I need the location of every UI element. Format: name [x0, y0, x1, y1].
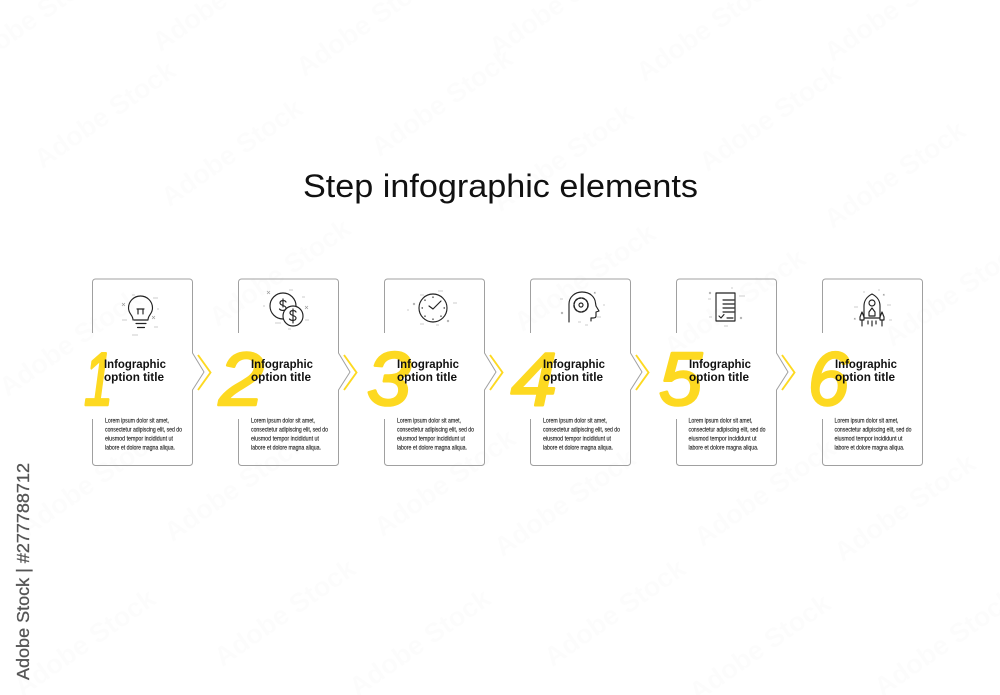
text: Adobe Stock [156, 92, 309, 212]
panel: step 6 [808, 279, 922, 466]
text: Adobe Stock [539, 552, 692, 672]
step 2 body text: Lorem ipsum dolor sit amet, [251, 418, 315, 424]
panel: step 1 [84, 279, 204, 466]
panel: step 2 [218, 279, 350, 466]
number 6: 6 [808, 337, 849, 421]
step 1 body text: eiusmod tempor incididunt ut [105, 436, 173, 442]
step 1 body text: Lorem ipsum dolor sit amet, [105, 418, 169, 424]
panel: step 4 [511, 279, 642, 466]
text: Adobe Stock [14, 422, 167, 542]
text: Adobe Stock [366, 42, 519, 162]
number 3: 3 [367, 337, 411, 421]
stock credit: Adobe Stock | #277788712 [13, 463, 33, 680]
text: Adobe Stock [489, 442, 642, 562]
icon: coins [263, 290, 309, 329]
icon: document [708, 288, 745, 326]
step 2 heading: option title [251, 372, 311, 384]
icon: rocket [854, 290, 892, 326]
step 2 heading: Infographic [251, 359, 314, 371]
arrow: chevron 5 [782, 355, 794, 390]
step 3 body text: Lorem ipsum dolor sit amet, [397, 418, 461, 424]
step 5 body text: Lorem ipsum dolor sit amet, [688, 418, 753, 424]
text: Adobe Stock [509, 217, 662, 337]
step 1 body text: labore et dolore magna aliqua. [105, 444, 175, 452]
step 2 body text: eiusmod tempor incididunt ut [251, 436, 319, 442]
card outline 2 [238, 279, 350, 466]
step 6 body text: Lorem ipsum dolor sit amet, [834, 418, 899, 424]
step 1 heading: option title [104, 372, 164, 384]
text: Adobe Stock [369, 422, 522, 542]
step 5 heading: Infographic [689, 359, 752, 371]
step 3 heading: option title [397, 372, 457, 384]
number 4: 4 [511, 337, 557, 421]
card outline 3 [384, 279, 496, 466]
icon: clock [407, 291, 457, 325]
panel: step 5 [659, 279, 788, 466]
step 6 body text: consectetur adipiscing elit, sed do [834, 426, 912, 434]
arrow: chevron 2 [344, 355, 356, 390]
arrow: chevron 4 [636, 355, 648, 390]
step 6 heading: option title [835, 372, 895, 384]
title: Step infographic elements [303, 168, 698, 204]
icon: light bulb [122, 295, 159, 335]
text: Adobe Stock [159, 427, 312, 547]
step 4 body text: labore et dolore magna aliqua. [543, 444, 613, 452]
step 3 body text: consectetur adipiscing elit, sed do [397, 426, 474, 434]
card outline 4 [530, 279, 642, 466]
step 4 body text: consectetur adipiscing elit, sed do [543, 426, 620, 434]
step 4 heading: Infographic [543, 359, 606, 371]
step 3 heading: Infographic [397, 359, 460, 371]
card outline 6 [822, 279, 922, 466]
text: Adobe Stock [819, 114, 972, 234]
step 1 heading: Infographic [104, 359, 167, 371]
text: Adobe Stock [829, 447, 982, 567]
step 5 body text: eiusmod tempor incididunt ut [688, 436, 757, 442]
step 1 body text: consectetur adipiscing elit, sed do [105, 426, 182, 434]
step 5 body text: consectetur adipiscing elit, sed do [688, 426, 766, 434]
text: Adobe Stock [487, 97, 640, 217]
step 2 body text: labore et dolore magna aliqua. [251, 444, 321, 452]
card outline 1 [92, 279, 204, 466]
card outline 5 [676, 279, 788, 466]
step 5 body text: labore et dolore magna aliqua. [688, 444, 759, 452]
step 5 heading: option title [689, 372, 749, 384]
step 6 body text: labore et dolore magna aliqua. [834, 444, 905, 452]
step 6 heading: Infographic [835, 359, 898, 371]
number 1: 1 [84, 337, 113, 421]
text: Adobe Stock [659, 242, 812, 362]
step 6 body text: eiusmod tempor incididunt ut [834, 436, 903, 442]
step 4 heading: option title [543, 372, 603, 384]
panel: step 3 [367, 279, 496, 466]
number 5: 5 [659, 337, 702, 421]
text: Adobe Stock [694, 57, 847, 177]
number 2: 2 [218, 337, 264, 421]
arrow: chevron 3 [490, 355, 502, 390]
text: Adobe Stock [689, 432, 842, 552]
step 4 body text: eiusmod tempor incididunt ut [543, 436, 611, 442]
step 3 body text: eiusmod tempor incididunt ut [397, 436, 465, 442]
step 4 body text: Lorem ipsum dolor sit amet, [543, 418, 607, 424]
step 3 body text: labore et dolore magna aliqua. [397, 444, 467, 452]
arrow: chevron 1 [198, 355, 210, 390]
text: Adobe Stock [209, 552, 362, 672]
text: Adobe Stock [204, 212, 357, 332]
text: Adobe Stock [29, 54, 182, 174]
step 2 body text: consectetur adipiscing elit, sed do [251, 426, 328, 434]
icon: head with gear [560, 292, 605, 325]
